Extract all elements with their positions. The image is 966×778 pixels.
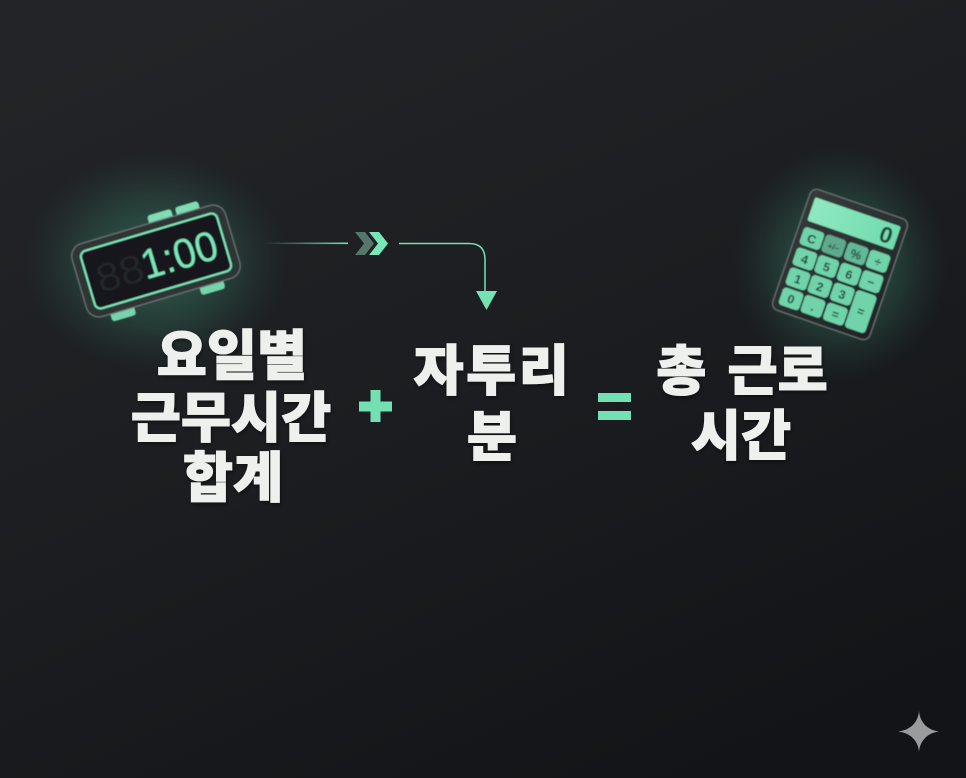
time readout: 1:00 bbox=[135, 221, 223, 288]
calculator key labels: = bbox=[830, 307, 841, 323]
text: 요일별 근무시간 합계 bbox=[131, 326, 331, 509]
calculator key labels bbox=[784, 232, 883, 330]
icon: double chevron bbox=[355, 232, 388, 255]
text: 자투리 분: 자투리 bbox=[414, 341, 571, 402]
icon: calculator: 0 bbox=[876, 221, 896, 249]
calculator keys bbox=[778, 226, 891, 334]
icon: calculator bbox=[771, 187, 909, 342]
text: 자투리 분: 분 bbox=[467, 407, 517, 468]
text: 총 근로 시간: 시간 bbox=[691, 406, 791, 467]
calculator key labels: C bbox=[805, 232, 818, 248]
calculator key labels: 0 bbox=[785, 292, 797, 307]
calculator key labels: 3 bbox=[837, 287, 848, 303]
calculator display bbox=[807, 197, 901, 250]
text: 요일별 근무시간 합계: 근무시간 bbox=[131, 388, 331, 449]
calculator key labels: 6 bbox=[843, 267, 855, 283]
calculator glow bbox=[730, 144, 950, 384]
plus sign bbox=[359, 390, 392, 422]
calculator key labels: − bbox=[865, 275, 877, 290]
calculator key labels: 2 bbox=[814, 279, 825, 295]
calculator key labels: 5 bbox=[821, 259, 832, 275]
calculator key labels: ÷ bbox=[872, 255, 883, 270]
text: 요일별 근무시간 합계: 합계 bbox=[183, 448, 283, 509]
ghost digits: 88 bbox=[91, 246, 149, 302]
calculator key labels: 1 bbox=[792, 272, 803, 287]
icon: digital alarm clock bbox=[66, 194, 246, 328]
text: 요일별 근무시간 합계: 요일별 bbox=[157, 326, 307, 387]
text: 총 근로 시간: 총 근로 bbox=[656, 341, 828, 402]
text: 자투리 분 bbox=[414, 341, 571, 468]
calculator key labels: 4 bbox=[799, 252, 810, 267]
icon: sparkle bbox=[898, 711, 939, 752]
calculator key labels: +/− bbox=[826, 241, 841, 254]
text: 총 근로 시간 bbox=[656, 341, 828, 467]
calculator key labels: % bbox=[848, 246, 863, 263]
calculator key labels: = bbox=[855, 304, 866, 320]
calculator key labels: . bbox=[809, 300, 817, 314]
arrow: flow from clock to 자투리 분 bbox=[264, 232, 497, 310]
clock glow bbox=[21, 150, 291, 374]
equals sign bbox=[598, 393, 631, 420]
